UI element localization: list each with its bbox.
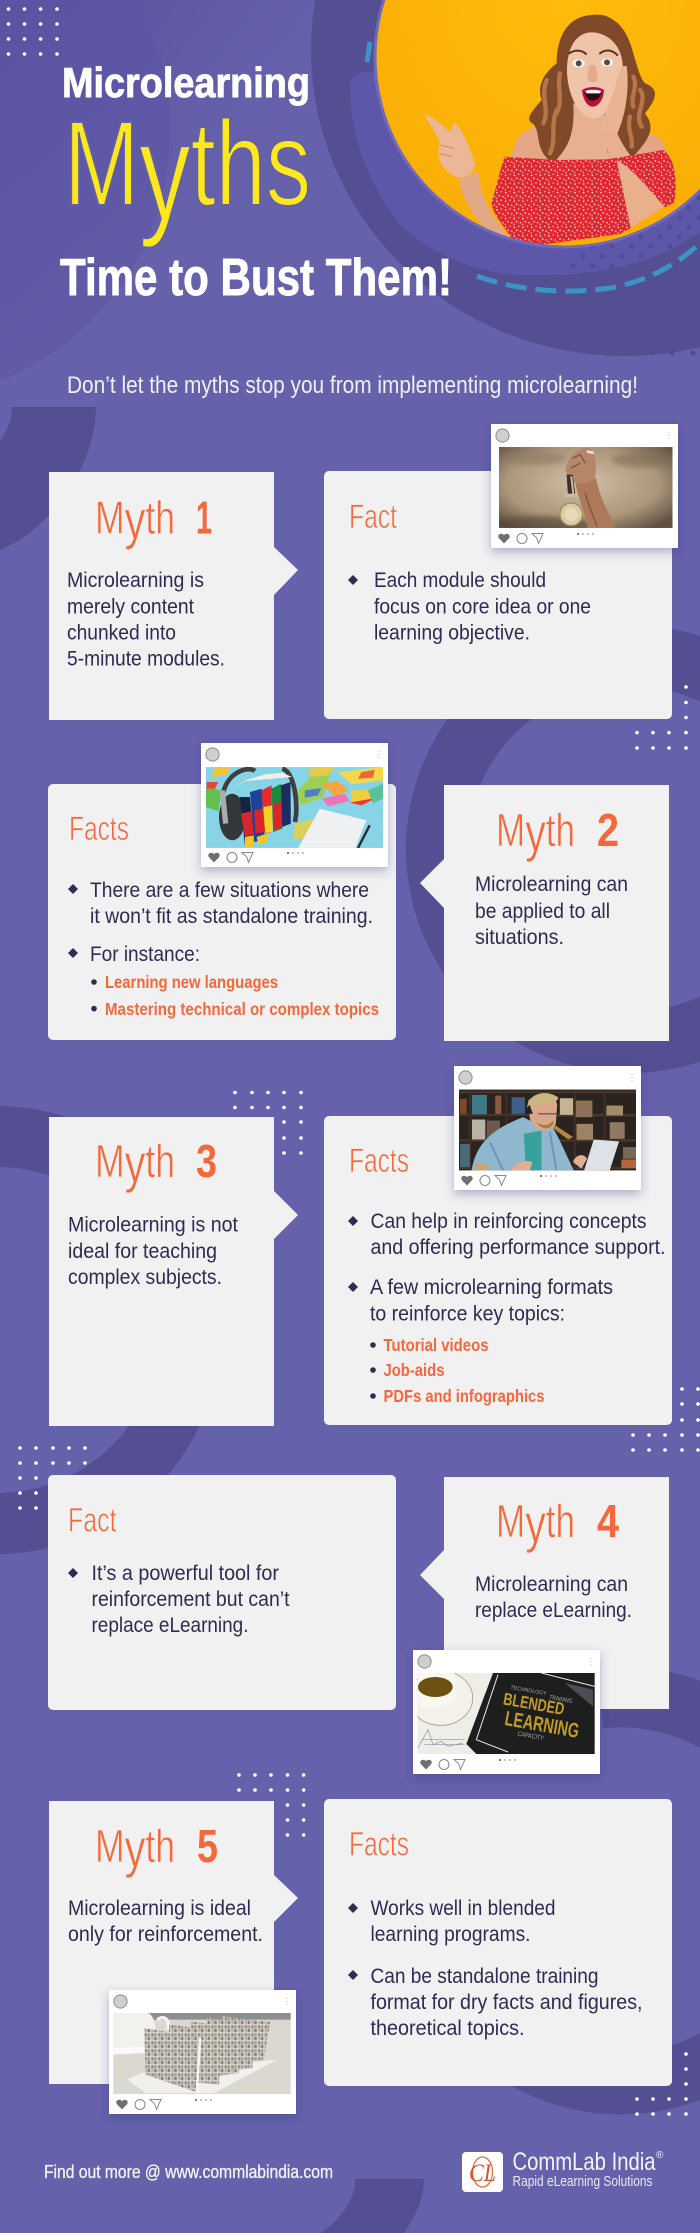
panel: myth 4 (420, 1477, 669, 1709)
panel: facts 5: Can be standalone training (370, 1965, 598, 1988)
panel: facts 5: format for dry facts and figures, (370, 1991, 642, 2014)
panel: myth 5: 5 (197, 1820, 218, 1872)
panel: facts 3 (324, 1116, 672, 1425)
photo: man with headset at laptop in library (454, 1066, 641, 1190)
panel: facts 3: PDFs and infographics (384, 1386, 545, 1406)
panel: fact 1 (324, 471, 672, 719)
background rings (0, 656, 700, 2084)
logo wordmark: ® (656, 2150, 664, 2161)
dark ring behind hero (311, 0, 700, 356)
panel: fact 4 (48, 1475, 396, 1710)
panel: facts 2: Learning new languages (105, 972, 278, 992)
panel: myth 3: y (125, 1134, 145, 1194)
background shape: bottom arc (321, 2179, 424, 2233)
panel: fact 1: Each module should (374, 569, 546, 592)
photo: blended learning tablet with coffee cup: BLENDED (502, 1689, 566, 1719)
panel: myth 1: M (95, 492, 133, 544)
panel: myth 5: M (95, 1820, 133, 1872)
panel: myth 2: M (496, 804, 534, 856)
hero photo rim (375, 0, 700, 247)
photo: bookshelves on a smartphone (109, 1990, 296, 2114)
panel: facts 5: theoretical topics. (370, 2017, 524, 2040)
panel: myth 1 (49, 472, 298, 720)
panel: facts 2 (48, 784, 396, 1040)
panel: fact 4: reinforcement but can’t (92, 1588, 290, 1611)
panel: facts 5 (324, 1799, 672, 2086)
panel: myth 2 (420, 785, 669, 1041)
panel: facts 3: to reinforce key topics: (370, 1303, 565, 1326)
panel: myth 4: th (546, 1495, 575, 1547)
icon: CommLab logo mark (462, 2152, 503, 2192)
decorative dots: top left (8, 9, 57, 54)
panel: myth 4: Microlearning can (475, 1573, 628, 1596)
title: M (64, 95, 165, 231)
panel: facts 2: it won’t fit as standalone training. (90, 905, 373, 928)
panel: facts 2: There are a few situations where (90, 879, 369, 902)
panel: myth 5: y (125, 1819, 145, 1879)
panel: myth 4: replace eLearning. (475, 1599, 632, 1622)
logo wordmark: Rapid eLearning Solutions (512, 2173, 652, 2190)
panel: facts 5: Works well in blended (370, 1897, 556, 1920)
footer link: Find out more @ www.commlabindia.com (44, 2161, 333, 2182)
panel: myth 3: complex subjects. (68, 1266, 222, 1289)
title: ths (191, 95, 311, 231)
decorative dots: other clusters (20, 687, 698, 2114)
panel: myth 4: y (525, 1494, 546, 1554)
panel: myth 5: th (145, 1820, 175, 1872)
ring around hero photo (350, 72, 700, 280)
logo wordmark: CommLab India (512, 2148, 656, 2176)
panel: facts 3: Can help in reinforcing concepts (370, 1210, 646, 1233)
dot texture accents (652, 350, 693, 356)
photo: language books with headphones on map (201, 743, 388, 867)
panel: myth 2: Microlearning can (475, 873, 628, 896)
panel: fact 1: Fact (349, 498, 397, 536)
panel: fact 1: focus on core idea or one (374, 596, 591, 618)
panel: myth 1: merely content (67, 596, 194, 618)
panel: myth 3: 3 (196, 1135, 217, 1187)
title: Microlearning (62, 59, 310, 106)
panel: myth 2: be applied to all (475, 900, 610, 923)
panel: fact 4: It’s a powerful tool for (92, 1562, 279, 1585)
panel: myth 1: Microlearning is (67, 569, 204, 592)
panel: facts 2: Mastering technical or complex topics (105, 999, 379, 1019)
panel: fact 4: Fact (68, 1502, 117, 1540)
icon: CommLab logo mark: CL (469, 2160, 496, 2187)
panel: facts 3: Job-aids (384, 1360, 445, 1380)
panel: myth 3: Microlearning is not (68, 1214, 238, 1236)
panel: facts 3: and offering performance support. (370, 1236, 666, 1259)
panel: facts 2: Facts (69, 810, 129, 848)
hero photo: surprised woman pointing (375, 0, 700, 247)
title: y (139, 95, 191, 249)
logo wordmark (512, 2148, 664, 2190)
panel: facts 5: Facts (349, 1826, 409, 1864)
panel: facts 3: A few microlearning formats (370, 1276, 613, 1299)
panel: myth 3 (49, 1117, 298, 1426)
panel: facts 3: Facts (349, 1142, 409, 1180)
panel: myth 2: situations. (475, 926, 564, 949)
photo: blended learning tablet with coffee cup: TECHNOLOGY (510, 1685, 547, 1697)
photo: blended learning tablet with coffee cup (409, 1650, 600, 1774)
panel: myth 2: y (525, 803, 546, 863)
panel: myth 3: ideal for teaching (68, 1240, 217, 1263)
background shapes: top left gradient and circle (0, 0, 330, 550)
panel: myth 4: 4 (597, 1495, 619, 1547)
title (60, 59, 452, 307)
panel: myth 1: 5-minute modules. (67, 648, 225, 671)
panel: facts 2: For instance: (90, 943, 200, 966)
panel: myth 2: th (546, 804, 575, 856)
panel: myth 5: Microlearning is ideal (68, 1897, 251, 1920)
panel: myth 1: chunked into (67, 622, 176, 645)
panel: fact 4: replace eLearning. (92, 1614, 248, 1637)
panel: myth 3: M (95, 1135, 133, 1187)
panel: myth 4: M (496, 1495, 534, 1547)
panel: myth 5: only for reinforcement. (68, 1923, 263, 1946)
panel: myth 2: 2 (597, 804, 619, 856)
title: Time to Bust Them! (60, 249, 452, 307)
panel: myth 1: th (145, 492, 175, 544)
panel: myth 3: th (145, 1135, 175, 1187)
panel: myth 5 (49, 1801, 298, 2084)
panel: facts 3: Tutorial videos (384, 1335, 489, 1355)
photo: raised arm holding medal (491, 424, 678, 548)
panel: fact 1: learning objective. (374, 622, 530, 645)
panel: myth 1: y (125, 490, 145, 550)
panel: myth 1: 1 (196, 492, 212, 544)
photo: blended learning tablet with coffee cup: CAPACITY (517, 1731, 545, 1742)
dash accents (367, 42, 700, 291)
panel: facts 5: learning programs. (370, 1923, 530, 1946)
photo: blended learning tablet with coffee cup: TRAINING (549, 1695, 573, 1705)
